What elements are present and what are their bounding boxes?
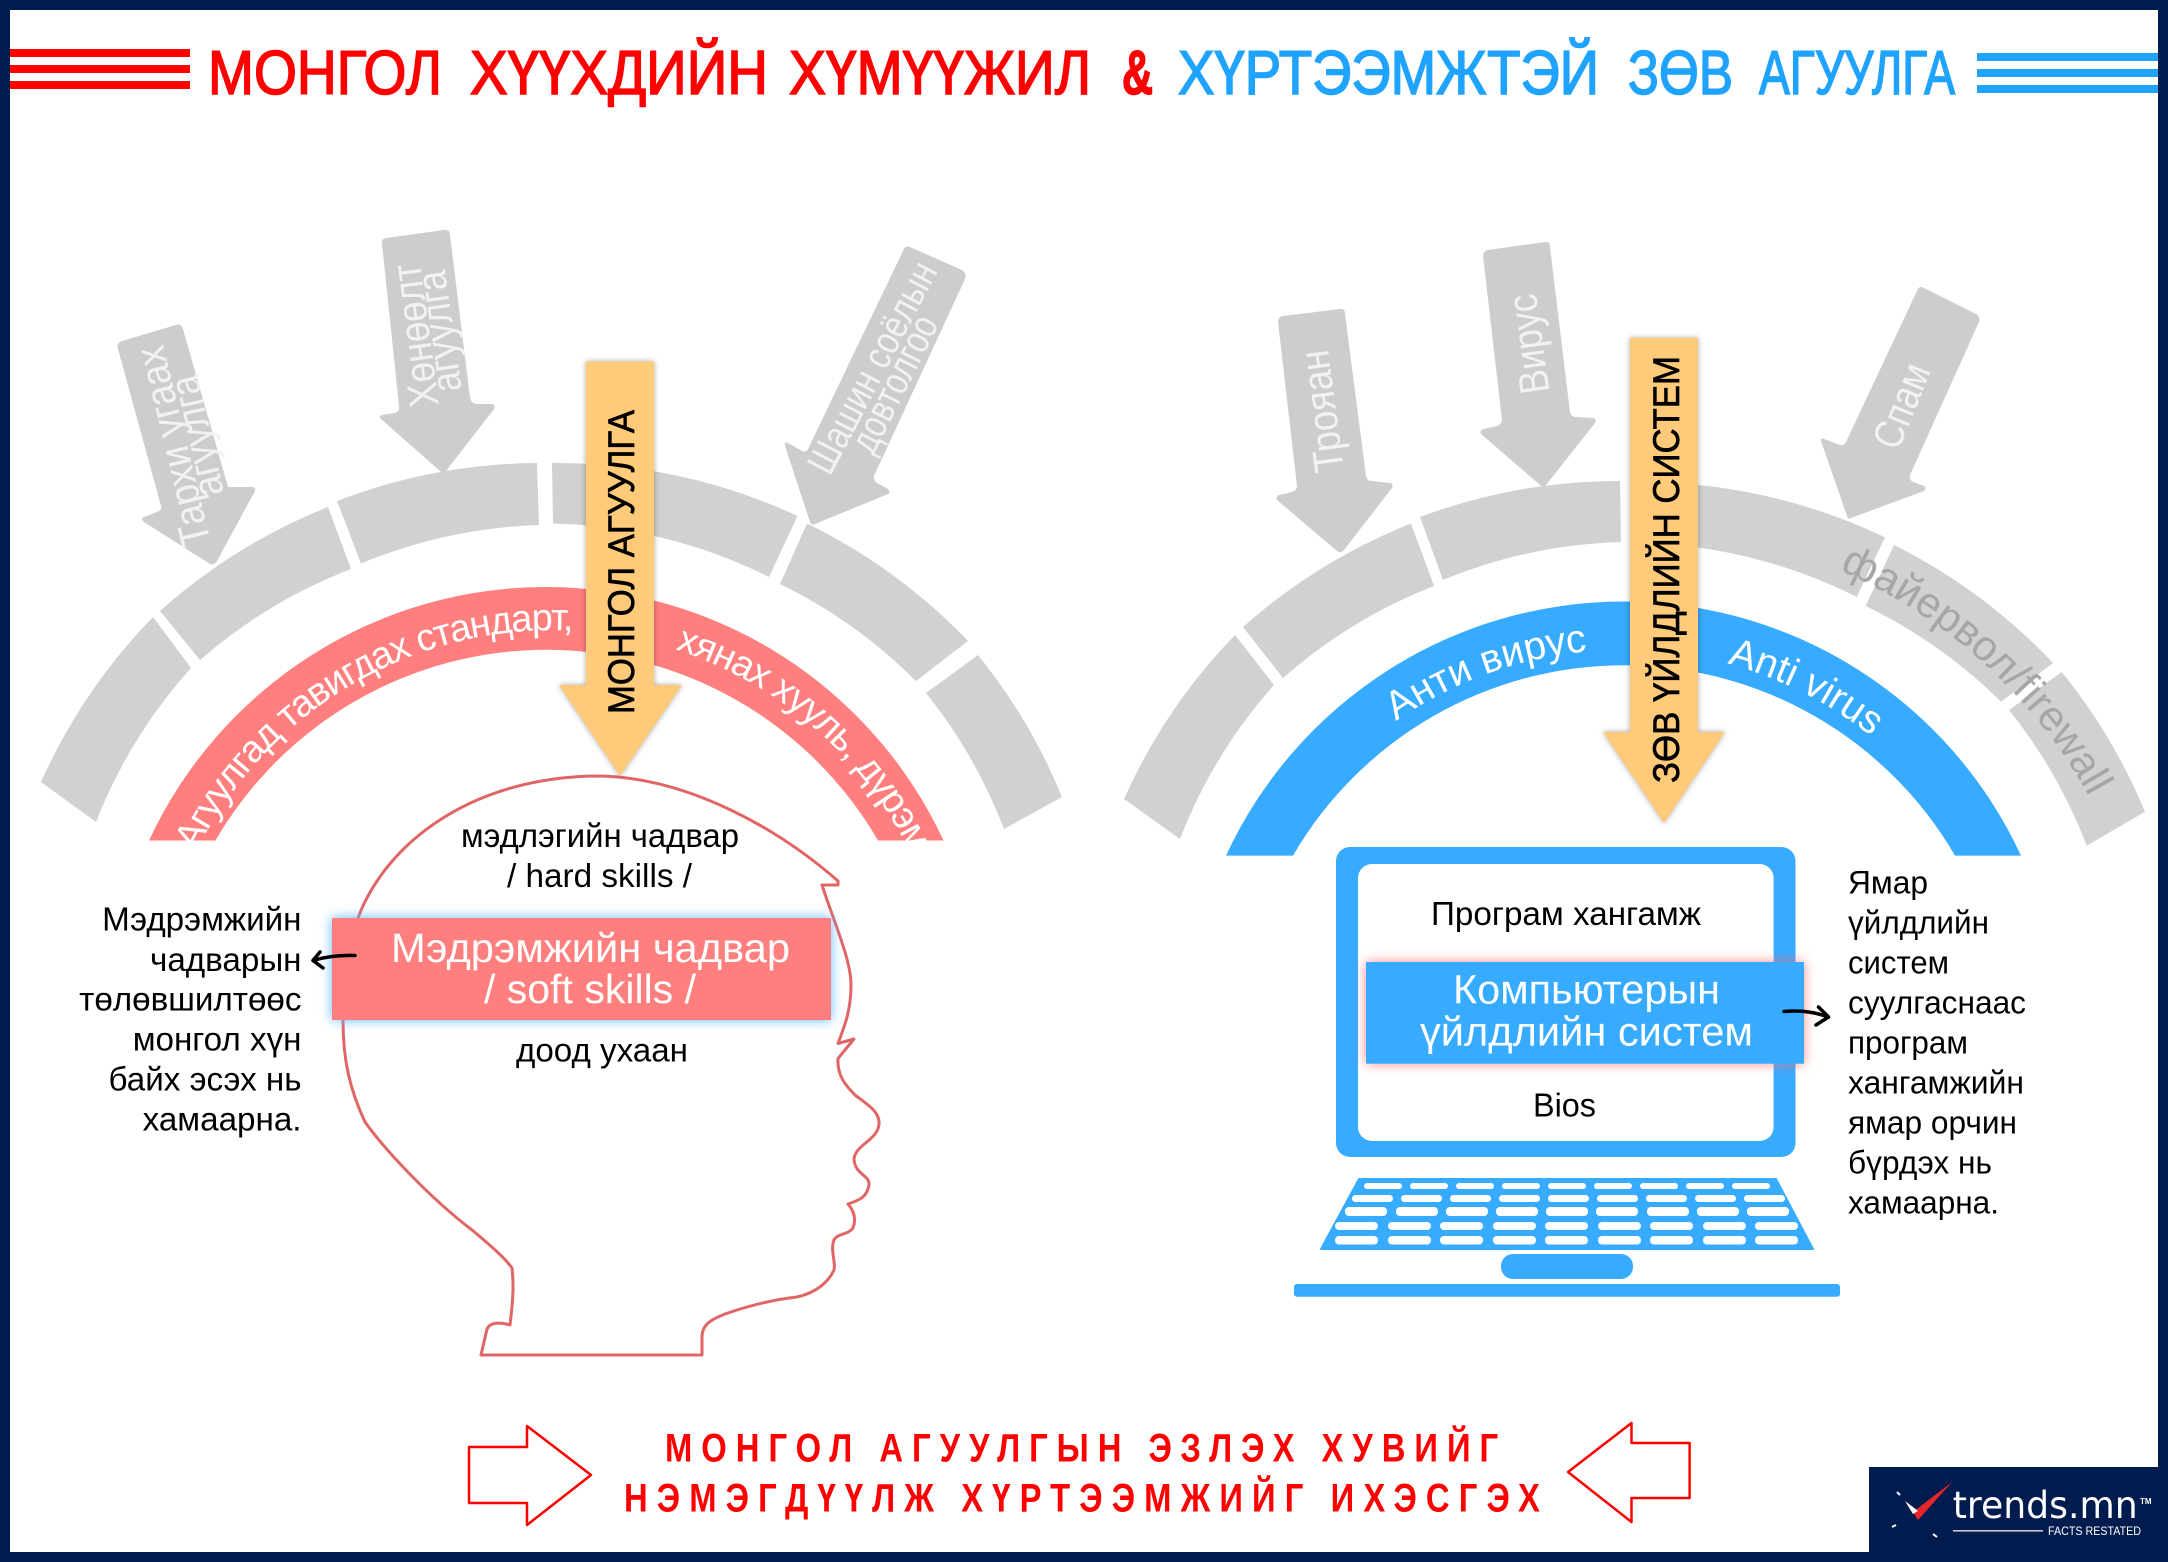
bottom message text: НЭМЭГДҮҮЛЖ ХҮРТЭЭМЖИЙГ ИХЭСГЭХ: [624, 1475, 1540, 1520]
left explanatory text: хамаарна.: [143, 1102, 302, 1139]
bottom call to action: [469, 1423, 1690, 1525]
gold arrow: Mongolian content: МОНГОЛ АГУУЛГА: [601, 410, 642, 714]
decorative red bars: [10, 49, 190, 89]
gray outer arc segments: [41, 463, 1062, 829]
gray arrow: religious and cultural invasion: Шашин соёлын: [799, 254, 946, 481]
hard skills text: мэдлэгийн чадвар: [461, 817, 739, 854]
gray arrow: brainwashing content: [118, 324, 255, 565]
left explanatory text: байх эсэх нь: [109, 1062, 302, 1099]
soft skills band: Мэдрэмжийн чадвар: [391, 925, 790, 971]
left explanatory text: төлөвшилтөөс: [79, 982, 302, 1019]
keyboard: [1321, 1179, 1813, 1249]
gray arrow: brainwashing content: Тархи угаах: [126, 342, 220, 552]
decorative blue bars: [1977, 53, 2158, 93]
soft skills band: / soft skills /: [484, 966, 697, 1012]
gray arrow: trojan: Трояан: [1290, 347, 1353, 475]
left explanatory text: [79, 902, 302, 1139]
gold arrow: proper operating system: [1603, 338, 1725, 823]
laptop base: [1294, 1284, 1840, 1297]
computer monitor: Bios: [1533, 1086, 1596, 1124]
gold arrow: Mongolian content: [559, 362, 682, 776]
bottom message text: [624, 1424, 1540, 1520]
curved arrow pointing left: [313, 952, 355, 968]
logo: trends.mn: FACTS RESTATED: [2048, 1524, 2141, 1538]
blue arc: antivirus: Anti virus: [1727, 640, 1880, 733]
gray arrow: harmful content: [380, 230, 495, 472]
gray arrow: virus: Вирус: [1498, 291, 1559, 397]
left explanatory text: Мэдрэмжийн: [102, 902, 302, 939]
right explanatory text: [1848, 864, 2026, 1220]
subconscious label: доод ухаан: [516, 1032, 688, 1068]
blue arc: antivirus: [1226, 602, 2021, 856]
title red part: ХҮМҮҮЖИЛ: [789, 39, 1091, 108]
gray arrow: religious and cultural invasion: [785, 246, 966, 525]
operating system band: Компьютерын: [1453, 966, 1720, 1012]
blue arc: antivirus: Анти вирус: [1390, 630, 1586, 721]
operating system band: үйлдлийн систем: [1420, 1008, 1753, 1054]
gray arrow: harmful content: агуулга: [407, 267, 471, 395]
hard skills text: / hard skills /: [507, 857, 693, 894]
right explanatory text: програм: [1848, 1024, 1968, 1060]
operating system band: [1366, 962, 1804, 1064]
computer monitor: [1336, 847, 1796, 1157]
soft skills band: [332, 918, 831, 1020]
logo: trends.mn: [1869, 1467, 2158, 1552]
left explanatory text: чадварын: [150, 942, 302, 979]
gray arrow: trojan: [1276, 309, 1393, 552]
right explanatory text: суулгаснаас: [1848, 984, 2026, 1020]
red arc: standards, laws and rules: хянах хууль, дүрэм: [676, 630, 927, 840]
firewall label on arc: файервол/firewall: [1844, 549, 2114, 794]
gray arrow: spam: [1821, 287, 1980, 519]
trackpad: [1501, 1254, 1633, 1279]
right explanatory text: бүрдэх нь: [1848, 1144, 1992, 1180]
outlined arrow pointing left: [1568, 1423, 1690, 1522]
icon: check mark: [1892, 1482, 1952, 1537]
computer monitor: Програм хангамж: [1431, 895, 1701, 932]
title red part: ХҮҮХДИЙН: [470, 38, 768, 108]
outlined arrow pointing right: [469, 1426, 591, 1525]
bottom message text: МОНГОЛ АГУУЛГЫН ЭЗЛЭХ ХУВИЙГ: [665, 1424, 1498, 1470]
title blue part: ХҮРТЭЭМЖТЭЙ: [1178, 38, 1599, 108]
red arc: standards, laws and rules: Агуулгад тавигдах стандарт,: [178, 610, 570, 840]
right explanatory text: хангамжийн: [1848, 1064, 2024, 1100]
title blue part: АГУУЛГА: [1759, 39, 1955, 108]
gray arrow: brainwashing content: агуулга: [160, 371, 233, 501]
title blue part: ЗӨВ: [1628, 39, 1733, 108]
title: [10, 38, 2158, 108]
panel: left, Mongolian child upbringing: [41, 230, 1062, 1356]
logo: trends.mn: TM: [2140, 1497, 2152, 1506]
right explanatory text: үйлдлийн: [1848, 904, 1989, 940]
title blue part: [1178, 38, 1955, 108]
red arc: standards, laws and rules: [149, 587, 944, 840]
gold arrow: proper operating system: ЗӨВ ҮЙЛДЛИЙН СИСТЕМ: [1645, 356, 1687, 783]
right explanatory text: хамаарна.: [1848, 1184, 1999, 1220]
title red part: &: [1122, 39, 1153, 108]
hard skills text: [461, 817, 739, 894]
right explanatory text: Ямар: [1848, 864, 1928, 900]
right explanatory text: систем: [1848, 944, 1949, 980]
gray arrow: religious and cultural invasion: довтолгоо: [842, 308, 947, 460]
left explanatory text: монгол хүн: [133, 1022, 302, 1059]
panel: right, proper computer setup: [1124, 242, 2145, 1297]
gray outer arc segments: [1124, 481, 2145, 846]
logo: trends.mn: trends.mn: [1953, 1484, 2138, 1527]
gray arrow: virus: [1480, 242, 1596, 486]
head outline: [343, 776, 879, 1355]
right explanatory text: ямар орчин: [1848, 1104, 2017, 1140]
curved arrow pointing right: [1784, 1007, 1828, 1025]
gray arrow: spam: Спам: [1863, 356, 1940, 455]
title red part: МОНГОЛ: [208, 39, 442, 108]
gray arrow: harmful content: Хөнөөлт: [382, 261, 448, 410]
title red part: [208, 38, 1153, 108]
